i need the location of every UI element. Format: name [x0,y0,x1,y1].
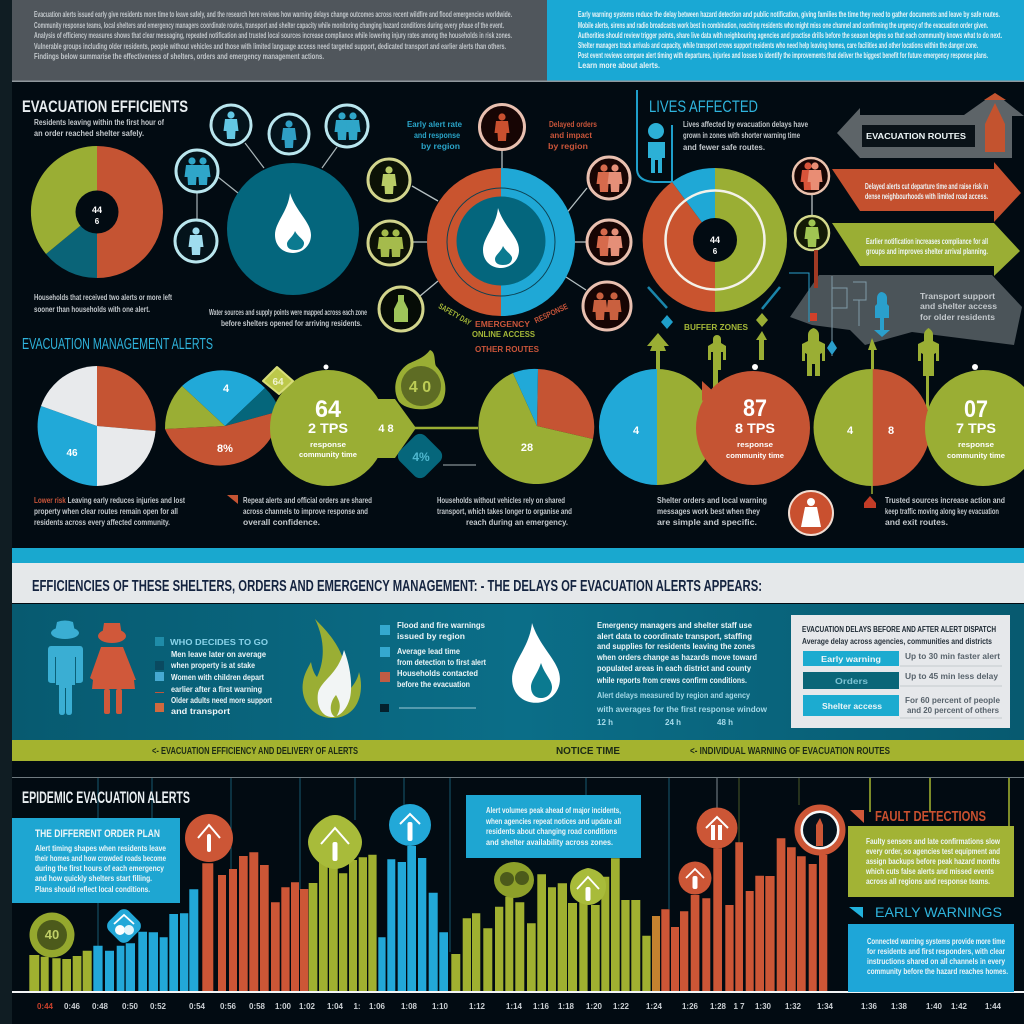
text: management paragraph: populated areas in each district and county [597,664,752,673]
text: pie captions row: are simple and specific. [657,518,757,527]
axis: time labels: 1:08 [401,1002,418,1011]
badge: red [185,814,233,862]
icons: green arrows [647,331,877,420]
circle: green stat 64: 64 [315,396,342,423]
connector: red stem [814,250,818,288]
panel: white comparison: Shelter access [822,702,883,711]
panel: blue callout left: Plans should reflect local conditions. [35,885,150,894]
legend: flame: Average lead time [397,647,461,656]
text: red note: and impact [550,131,592,140]
icon node: green [795,216,829,250]
text: pie intro: Residents leaving within the first hour of [34,118,164,127]
chart: donut efficiency: 6 [95,217,100,226]
legend: flame: Households contacted [397,669,478,678]
icon: blue person [648,123,665,173]
badge: green house small [570,868,606,905]
panel: green callout: which cuts false alerts and missed events [865,867,994,876]
bracket: lives affected [637,90,672,182]
axis: time labels: 1:34 [817,1002,834,1011]
panel: top grey intro: Community response teams, local shelters and emergency managers coordinate routes, transport and shelter capacity while monitoring changing hazard conditions during every phase of the event. [34,21,504,30]
text: pie captions row: Shelter orders and local warning [657,496,767,505]
icon: teal diamond badge [395,431,445,481]
chart: pie B [165,370,280,466]
badge: red house large [696,808,738,848]
text: donut caption: sooner than households with one alert. [34,305,150,314]
panel: top grey intro [12,0,547,81]
text: pie captions row: messages work best when they [657,507,760,516]
axis: time labels: 1:36 [861,1002,878,1011]
icon: small green badge: 64 [272,377,284,388]
axis: time labels: 1:14 [506,1002,523,1011]
text: hub caption [209,308,367,328]
axis: time labels: 1:26 [682,1002,699,1011]
labels: curved ring captions [437,302,570,354]
labels: curved ring captions: RESPONSE [533,302,570,325]
icon: teal diamond badge: 4% [412,450,430,464]
legend: people: Women with children depart [171,673,264,682]
band: green strip: <- EVACUATION EFFICIENCY AND DELIVERY OF ALERTS [152,746,358,757]
icon: red person badge [789,491,833,535]
chart: bars [29,838,827,992]
panel: top grey intro: Analysis of efficiency measures shows that clear messaging, repeated notification and trusted local sources increase compliance while lowering injury rates among the households in risk zones. [34,31,512,40]
axis: time labels: 1:32 [785,1002,802,1011]
chart: pie C: 28 [521,442,533,454]
badge: green [30,912,74,958]
panel: white comparison [791,615,1010,728]
connector: red and green nodes [811,195,813,215]
chart: pie A: 46 [66,448,78,459]
text: pie captions row: Lower risk Leaving early reduces injuries and lost [34,496,185,505]
axis: time labels: 1:00 [275,1002,292,1011]
icon: green pear badge: 4 0 [409,379,431,396]
panel: blue callout centre: residents about changing road conditions [486,827,617,836]
text: lives affected copy: Lives affected by evacuation delays have [683,120,808,129]
icon: green pear badge [395,350,445,409]
axis: time labels: 1: [353,1002,361,1011]
arrow: grey translucent: for older residents [920,313,996,322]
band: section heading [12,563,1024,603]
panel: blue callout left: THE DIFFERENT ORDER PLAN [35,828,160,840]
legend: people: and transport [171,707,230,716]
axis: time labels: 0:54 [189,1002,206,1011]
labels: curved ring captions: ONLINE ACCESS [472,330,536,339]
panel: top grey intro: Evacuation alerts issued early give residents more time to leave safely, and the research here reviews how warning delays change outcomes across recent wildfire and flood emergencies worldwide. [34,10,512,19]
axis: time labels: 1:20 [586,1002,603,1011]
heading: epidemic evacuation alerts: EPIDEMIC EVACUATION ALERTS [22,788,190,807]
text: pie captions row: Households without vehicles rely on shared [437,496,565,505]
panel: blue callout left [12,818,180,903]
axis: time labels: 1:38 [891,1002,908,1011]
panel: blue callout left: Alert timing shapes when residents leave [35,844,166,853]
circle: green stat 64 [270,364,416,486]
connector lines: ring nodes [412,150,587,296]
text: management paragraph: 48 h [717,718,733,727]
chart: pie A [38,366,156,486]
circle: green stat 07: response [958,442,994,449]
panel: white comparison: Average delay across agencies, communities and districts [802,637,992,646]
axis: time labels [37,1002,1002,1011]
icons: green figures [657,328,939,410]
icon nodes: blue people [175,105,368,262]
text: management paragraph: Alert delays measured by region and agency [597,691,750,700]
rule: chart top [12,777,1024,778]
panel: white comparison: Up to 45 min less delay [905,672,999,681]
text: red note [548,120,597,151]
connector: blue corner [789,273,809,322]
axis: time labels: 1:16 [533,1002,550,1011]
axis: time labels: 0:48 [92,1002,109,1011]
legend: flame [380,621,486,712]
panel: blue callout centre [466,795,641,858]
arrow: grey translucent: Transport support [920,292,995,301]
badge: green house [308,815,362,869]
text: lives affected copy: grown in zones with shorter warning time [683,131,800,140]
circle: red stat 87 [696,364,810,485]
axis: time labels: 1:06 [369,1002,386,1011]
band: cyan strip [12,548,1024,563]
chart: pie B: 8% [217,443,233,455]
text: management paragraph: alert data to coordinate transport, staffing [597,632,752,641]
labels: curved ring captions: EMERGENCY [475,320,531,329]
marker: red triangle [850,810,864,823]
text: management paragraph: Emergency managers and shelter staff use [597,621,753,630]
text: donut caption: Households that received two alerts or more left [34,293,172,302]
text: hub caption: Water sources and supply points were mapped across each zone [209,308,367,317]
circle: green stat 64: 2 TPS [308,420,348,436]
icon node: red [793,158,829,194]
axis: time labels: 0:56 [220,1002,237,1011]
badge: blue house [389,804,431,846]
panel: white comparison: and 20 percent of others [907,706,1000,715]
text: pie captions row: residents across every affected community. [34,518,170,527]
chart: pie E: 8 [888,425,894,437]
text: management paragraph: with averages for the first response window [596,705,768,714]
text: pie captions row: overall confidence. [243,518,320,527]
legend: people: WHO DECIDES TO GO [170,638,268,647]
axis: time labels: 0:50 [122,1002,139,1011]
circle: green stat 07: 7 TPS [956,420,996,436]
badge: green: 40 [45,927,59,942]
badge: red ring tower [798,808,842,852]
text: pie captions row [34,495,1005,527]
axis: time labels: 0:44 [37,1002,54,1011]
chart: donut efficiency [31,146,163,278]
red marker [810,313,817,321]
axis: time labels: 1:28 [710,1002,727,1011]
legend: people: Men leave later on average [171,650,267,659]
axis: time labels: 1:42 [951,1002,968,1011]
chart: pie E [814,340,930,494]
circle: teal water drop hub [227,163,359,295]
panel: top grey intro: Vulnerable groups including older residents, people without vehicles and those with limited language access need targeted support, dedicated transport and earlier alerts than others. [34,42,506,51]
axis: time labels: 1:04 [327,1002,344,1011]
heading: early warnings: EARLY WARNINGS [875,904,1002,920]
legend: people: earlier after a first warning [171,685,262,694]
band: green strip: NOTICE TIME [556,746,620,757]
circle: red stat 87: community time [726,453,784,460]
lines: chart droplines [98,778,1009,952]
arrow: grey translucent [790,275,1022,356]
arrow: red [832,162,1021,222]
axis: time labels: 1:22 [613,1002,630,1011]
text: pie captions row: Repeat alerts and official orders are shared [243,496,372,505]
legend: people [155,637,272,716]
chart: lives affected donut [643,168,787,312]
panel: top blue intro [547,0,1024,81]
legend: flame: issued by region [397,632,465,641]
chart: pie D: 4 [633,425,640,437]
text: management paragraph: 12 h [597,718,613,727]
icon nodes: red people [480,104,631,330]
text: lives affected copy [683,120,808,152]
text: pie captions row: Trusted sources increase action and [885,496,1005,505]
text: red note: by region [548,142,588,151]
panel: white comparison: Up to 30 min faster alert [905,652,1000,661]
marker: blue triangle [849,907,863,918]
panel: white comparison: Orders [835,677,869,686]
text: management paragraph [596,621,768,727]
circle: red stat 87: response [737,442,773,449]
axis: time labels: 1 7 [733,1002,745,1011]
panel: blue callout left: during the first hours of each emergency [35,864,164,873]
panel: blue callout right [848,924,1014,992]
icons: blue and green diamonds [661,313,768,329]
arrow: grey translucent: and shelter access [920,302,998,311]
text: management paragraph: 24 h [665,718,681,727]
badge: green dark [494,862,534,898]
band: green strip: <- INDIVIDUAL WARNING OF EVACUATION ROUTES [690,746,890,757]
axis: time labels: 1:02 [299,1002,316,1011]
icon: flame [303,619,361,718]
chart: lives affected donut: 6 [713,247,718,256]
text: cyan note: and response [414,131,460,140]
panel: white comparison: Early warning [821,655,881,664]
heading: fault detections: FAULT DETECTIONS [875,808,986,825]
text: hub caption: before shelters opened for arriving residents. [221,319,362,328]
chart: central ring [427,168,575,316]
connector lines: blue nodes [197,143,337,219]
axis: time labels: 1:30 [755,1002,772,1011]
panel: teal management [12,604,1024,740]
heading: evacuation management alerts: EVACUATION MANAGEMENT ALERTS [22,336,213,353]
heading: lives affected: LIVES AFFECTED [649,97,758,116]
axis: time labels: 1:44 [985,1002,1002,1011]
icon nodes: green people [368,159,423,331]
axis: time labels: 0:52 [150,1002,167,1011]
circle: green stat 07 [925,364,1024,486]
axis: time labels: 0:46 [64,1002,81,1011]
text: pie intro: an order reached shelter safely. [34,129,144,138]
heading: evacuation efficients: EVACUATION EFFICIENTS [22,97,188,116]
icon: small green badge [263,367,293,394]
text: pie captions row: reach during an emergency. [466,518,568,527]
arrow: grey [837,93,1024,158]
badge: blue [104,906,144,946]
text: pie captions row: transport, which takes longer to organise and [437,507,572,516]
panel: green callout [848,826,1014,897]
text: cyan note: by region [421,142,460,151]
text: donut caption [34,293,172,314]
badge: red house small [678,862,712,894]
circle: red stat 87: 8 TPS [735,420,775,436]
text: management paragraph: when orders change as hazards move toward [596,653,757,662]
axis: time labels: 0:58 [249,1002,266,1011]
circle: green stat 07: 07 [964,396,988,423]
text: pie captions row: property when clear routes remain open for all [34,507,178,516]
text: lives affected copy: and fewer safe routes. [683,143,765,152]
axis: time labels: 1:24 [646,1002,663,1011]
circle: green stat 64: 4 8 [378,423,394,435]
circle: green stat 64: community time [299,452,357,459]
arrow: green [832,223,1020,276]
legend: people: Older adults need more support [171,696,272,705]
panel: top grey intro: Findings below summarise the effectiveness of shelters, orders and emergency management actions. [34,52,324,61]
lines: blue diagonals [648,287,780,309]
connector: green line [415,427,478,429]
icon: man with hat [48,620,83,715]
panel: blue callout centre: Alert volumes peak ahead of major incidents, [486,806,621,815]
text: management paragraph: and supplies for residents leaving the zones [597,642,756,651]
circle: green stat 64: response [310,442,346,449]
legend: flame: Flood and fire warnings [397,621,486,630]
icon: water drop [512,623,560,703]
chart: pie B: 4 [223,383,230,395]
legend: flame: from detection to first alert [397,658,486,667]
text: pie captions row: and exit routes. [885,518,948,527]
panel: blue callout left: their homes and how crowded roads become [35,854,166,863]
line: small rule [443,464,476,466]
panel: top blue intro: Learn more about alerts. [578,61,660,70]
chart: pie D [599,369,715,485]
icon: woman with hat [90,623,136,714]
text: pie captions row: across channels to improve response and [243,507,368,516]
labels: curved ring captions: SAFETY DAY [437,302,473,328]
chart: pie C [478,369,594,484]
axis: time labels: 1:40 [926,1002,943,1011]
circle: red stat 87: 87 [743,395,767,422]
panel: green callout: across all regions and response teams. [866,877,990,886]
panel: blue callout centre: and shelter availability across zones. [486,838,613,847]
text: cyan note: Early alert rate [407,120,463,129]
panel: white comparison: For 60 percent of people [905,696,1001,705]
legend: flame: before the evacuation [397,680,470,689]
arrow: grey: EVACUATION ROUTES [866,132,967,141]
text: management paragraph: while reports from crews confirm conditions. [596,676,747,685]
chart: lives affected donut: 44 [710,235,720,245]
band: green strip [12,740,1024,761]
axis: time labels: 1:10 [432,1002,449,1011]
chart: pie E: 4 [847,425,854,437]
circle: green stat 07: community time [947,453,1005,460]
legend: people: when property is at stake [170,661,255,670]
text: pie intro [34,118,164,138]
text: cyan note [407,120,463,151]
chart: donut efficiency: 44 [92,205,102,215]
panel: blue callout centre: when agencies repeat notices and update all [485,817,621,826]
panel: blue callout left: and how quickly shelters start filling. [35,874,152,883]
text: red note: Delayed orders [549,120,597,129]
axis: time labels: 1:12 [469,1002,486,1011]
label: green caption: BUFFER ZONES [684,323,749,332]
labels: curved ring captions: OTHER ROUTES [475,345,540,354]
axis: baseline [12,991,1024,993]
icon: red house tag [864,496,876,508]
axis: time labels: 1:18 [558,1002,575,1011]
